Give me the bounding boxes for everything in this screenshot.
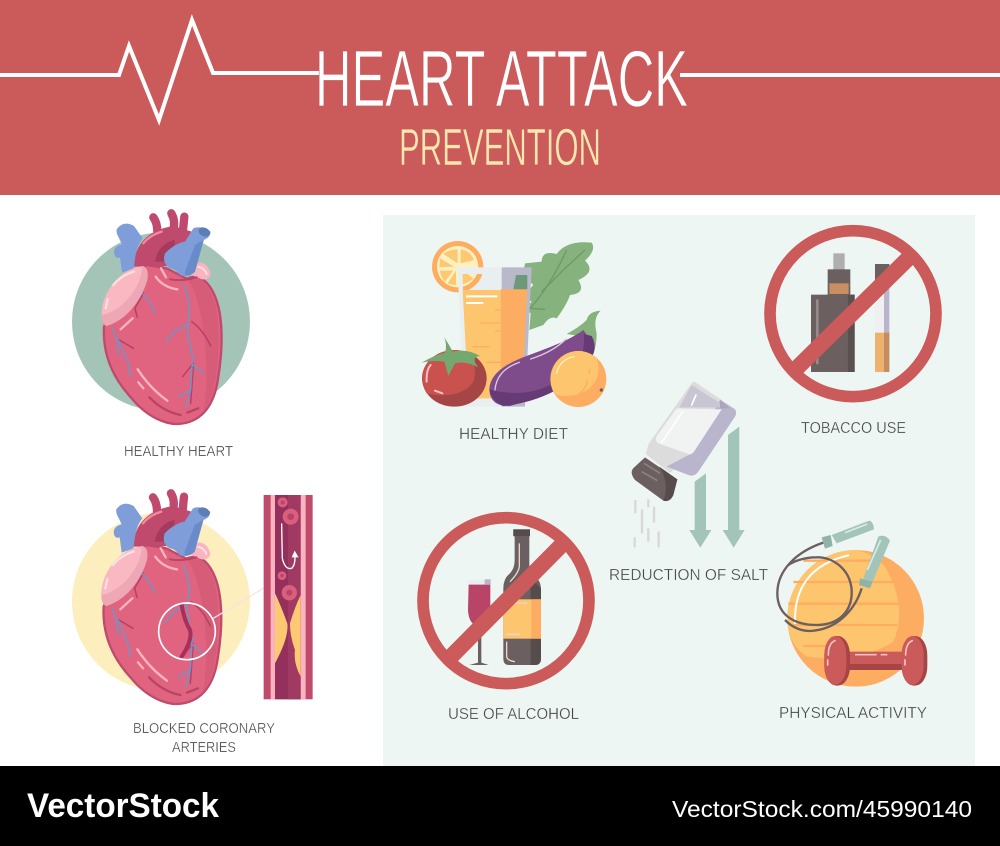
icon: healthy diet [422, 241, 606, 407]
bottle [503, 529, 541, 665]
blockage detail [182, 605, 191, 657]
header banner [0, 0, 1000, 195]
label: healthy heart: HEALTHY HEART [124, 444, 233, 460]
dumbbell [824, 636, 927, 686]
orange [550, 351, 606, 407]
cigarette [875, 264, 889, 372]
icon: physical activity [777, 521, 927, 687]
icon: salt shaker with down arrows [632, 384, 745, 548]
footer brand: VectorStock [27, 787, 219, 825]
label: blocked coronary arteries: BLOCKED CORONARY [133, 721, 275, 737]
label: reduction of salt: REDUCTION OF SALT [609, 567, 769, 584]
label: physical activity: PHYSICAL ACTIVITY [779, 705, 927, 722]
label: use of alcohol: USE OF ALCOHOL [448, 706, 579, 723]
vape [811, 253, 855, 372]
exercise ball [787, 550, 924, 687]
label: blocked coronary arteries: ARTERIES [172, 740, 236, 756]
eggplant [567, 311, 601, 354]
icon: no tobacco [770, 231, 936, 397]
label: blocked coronary arteries [133, 721, 275, 756]
icon: no alcohol [423, 518, 589, 684]
footer bar [0, 766, 1000, 846]
tomato [422, 350, 487, 407]
shaker cap [632, 457, 677, 501]
icon: healthy heart [72, 213, 250, 424]
subtitle: PREVENTION [399, 119, 601, 177]
arrows [689, 473, 711, 548]
icon: blocked heart [72, 493, 313, 704]
wine glass [468, 579, 491, 665]
label: tobacco use: TOBACCO USE [801, 420, 906, 437]
falling salt [635, 499, 659, 547]
icon: heartbeat line [0, 20, 1000, 120]
panel: prevention background [383, 215, 975, 766]
leaf [524, 242, 593, 330]
skipping rope [777, 543, 862, 631]
title: HEART ATTACK [315, 34, 688, 123]
artery cross-section [264, 495, 313, 699]
footer url: VectorStock.com/45990140 [672, 796, 972, 822]
label: healthy diet: HEALTHY DIET [459, 426, 569, 443]
glass [457, 267, 502, 407]
